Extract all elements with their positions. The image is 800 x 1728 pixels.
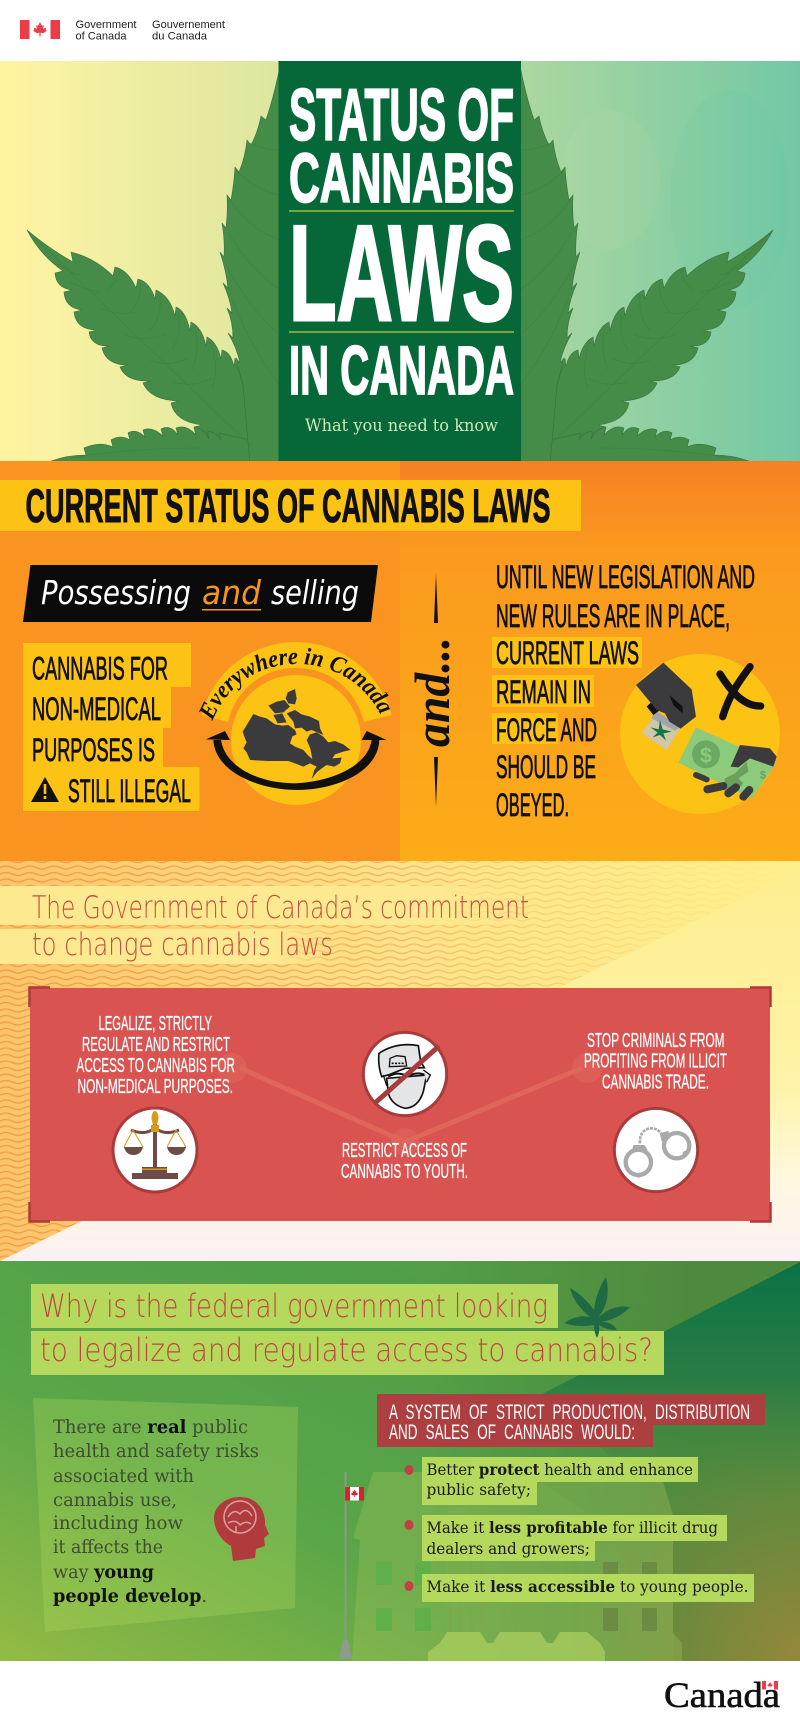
- until new legislation text: OBEYED.: [496, 787, 569, 823]
- still illegal text block: NON-MEDICAL: [32, 691, 161, 727]
- connector line: [217, 1053, 602, 1156]
- commitment: criminals: [584, 1029, 727, 1094]
- bullet: protect: Better protect health and enhance: [426, 1460, 693, 1479]
- icon: warning triangle: [31, 777, 59, 802]
- commitment: legalize: [76, 1012, 235, 1098]
- bullet: accessible: [404, 1574, 754, 1602]
- title: STATUS OF: [289, 75, 514, 156]
- still illegal text block: PURPOSES IS: [32, 732, 155, 768]
- everywhere in canada badge: [199, 642, 392, 805]
- government of canada signature: [20, 19, 225, 42]
- panel: health risks: There are real public: [53, 1417, 248, 1438]
- icon: head with brain: [214, 1497, 269, 1561]
- until new legislation text: REMAIN IN: [496, 674, 591, 710]
- icon: flag on pole: [339, 1472, 364, 1659]
- section: current status: [0, 461, 800, 861]
- still illegal text block: CANNABIS FOR: [32, 650, 168, 686]
- possessing and selling banner: [23, 565, 378, 622]
- icon: map of canada: [243, 689, 351, 779]
- arched label: [212, 664, 383, 722]
- section heading: [31, 1284, 664, 1375]
- government of canada signature: du Canada: [152, 30, 208, 42]
- panel: health risks: it affects the: [53, 1537, 163, 1558]
- hero section: [0, 55, 800, 465]
- section heading: [0, 886, 550, 964]
- title: [289, 75, 514, 409]
- icon: illegal exchange: $: [760, 769, 766, 781]
- section: why legalize: [0, 1261, 800, 1661]
- panel: health risks: associated with: [53, 1466, 194, 1487]
- government of canada signature: Government: [76, 19, 136, 31]
- cannabis leaf left half: [26, 72, 278, 461]
- and... divider: [404, 573, 460, 807]
- bullet: profitable: [404, 1515, 727, 1561]
- panel: commitments: [30, 988, 770, 1222]
- until new legislation text: CURRENT LAWS: [496, 635, 639, 671]
- commitment: legalize: REGULATE AND RESTRICT: [82, 1033, 230, 1056]
- arrows around the map: [206, 731, 387, 790]
- and... divider: and...: [404, 637, 460, 747]
- bullet: protect: public safety;: [426, 1481, 531, 1499]
- icon: small cannabis leaf: [564, 1277, 630, 1338]
- commitment: legalize: LEGALIZE, STRICTLY: [98, 1012, 212, 1035]
- still illegal text block: [23, 643, 200, 811]
- icon: illegal exchange: $: [700, 743, 712, 767]
- panel: health risks: cannabis use,: [53, 1490, 177, 1511]
- commitment: legalize: NON-MEDICAL PURPOSES.: [78, 1075, 233, 1098]
- section heading: to legalize and regulate access to cannabis?: [40, 1331, 653, 1369]
- commitment: criminals: CANNABIS TRADE.: [602, 1070, 709, 1094]
- panel: health risks: way young: [53, 1562, 154, 1583]
- section heading: The Government of Canada’s commitment: [32, 890, 529, 926]
- government of canada signature: Gouvernement: [152, 19, 225, 31]
- bullet: accessible: Make it less accessible to young people.: [426, 1577, 748, 1596]
- section heading: [0, 479, 581, 532]
- bullet: profitable: Make it less profitable for illicit drug: [426, 1518, 718, 1537]
- still illegal text block: STILL ILLEGAL: [68, 773, 191, 809]
- icon: scales of justice: [113, 1108, 197, 1192]
- commitment: legalize: ACCESS TO CANNABIS FOR: [76, 1054, 235, 1077]
- commitment: youth: RESTRICT ACCESS OF: [342, 1139, 467, 1162]
- commitment: youth: [341, 1139, 468, 1183]
- everywhere in canada badge: Everywhere in Canada: [199, 648, 390, 721]
- callout: strict system: [377, 1394, 765, 1447]
- subtitle: What you need to know: [305, 416, 498, 436]
- government of canada signature: of Canada: [76, 30, 127, 42]
- cannabis leaf right half: [521, 70, 774, 461]
- possessing and selling banner: selling: [271, 573, 359, 612]
- panel: health risks: people develop.: [53, 1586, 207, 1607]
- bullet: protect: [404, 1457, 698, 1505]
- possessing and selling banner: Possessing: [41, 573, 191, 612]
- title panel: [278, 61, 521, 461]
- until new legislation text: [492, 559, 755, 823]
- icon: illegal exchange: [620, 654, 780, 814]
- section heading: Why is the federal government looking: [40, 1287, 548, 1325]
- section heading: to change cannabis laws: [32, 927, 333, 963]
- title: IN CANADA: [289, 332, 514, 409]
- title: LAWS: [289, 197, 514, 349]
- bullet: profitable: dealers and growers;: [426, 1540, 590, 1558]
- canada wordmark: Canada: [664, 1675, 780, 1715]
- panel: health risks: [33, 1398, 298, 1632]
- icon: handcuffs: [614, 1108, 698, 1192]
- icon: no youth: [363, 1032, 447, 1116]
- panel: health risks: including how: [53, 1513, 183, 1534]
- icon: parliament building: [352, 1472, 682, 1661]
- until new legislation text: SHOULD BE: [496, 749, 596, 785]
- until new legislation text: FORCE AND: [496, 712, 597, 748]
- section: government commitment: [0, 861, 800, 1261]
- title: CANNABIS: [289, 139, 514, 217]
- panel: health risks: health and safety risks: [53, 1441, 259, 1462]
- callout: strict system: AND SALES OF CANNABIS WOULD:: [389, 1421, 635, 1444]
- commitment: youth: CANNABIS TO YOUTH.: [341, 1160, 468, 1183]
- possessing and selling banner: and: [202, 573, 262, 612]
